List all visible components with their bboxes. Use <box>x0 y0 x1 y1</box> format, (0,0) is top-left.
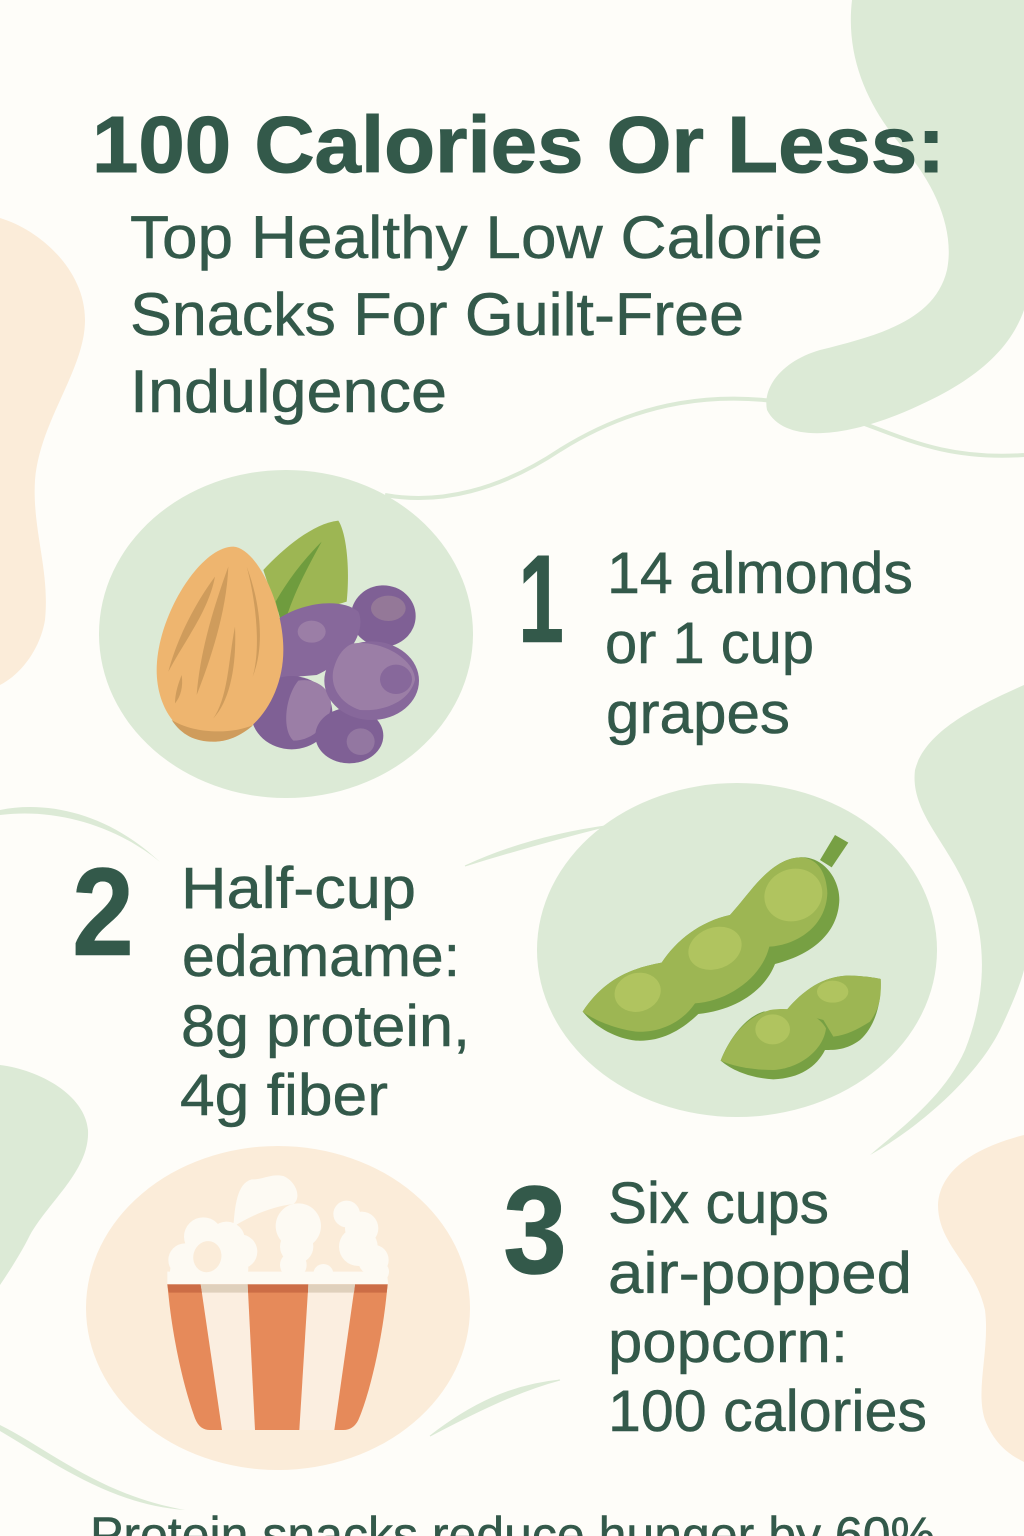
text: item 2: 4g fiber <box>180 1063 388 1128</box>
icon: popcorn bucket <box>167 1175 389 1430</box>
text: item 2: 8g protein, <box>181 994 470 1059</box>
title: 100 Calories Or Less: <box>92 100 945 189</box>
icon: almond with grapes <box>157 521 419 763</box>
text: item 2 <box>180 856 470 1128</box>
subtitle: Snacks For Guilt-Free <box>130 281 744 348</box>
number 2: 2 <box>72 843 134 982</box>
subtitle: Indulgence <box>130 358 447 425</box>
text: item 3: popcorn: <box>608 1310 848 1375</box>
text: item 3: air-popped <box>608 1241 912 1306</box>
panel: edamame <box>537 783 937 1117</box>
text: item 2: Half-cup <box>181 856 416 921</box>
subtitle <box>130 204 823 425</box>
text: item 1: 14 almonds <box>607 541 913 606</box>
text: item 3: Six cups <box>608 1171 829 1236</box>
text: item 1: grapes <box>606 681 790 746</box>
panel: popcorn <box>86 1146 470 1470</box>
icon: edamame pods <box>583 835 881 1079</box>
subtitle: Top Healthy Low Calorie <box>130 204 823 271</box>
circle background: popcorn <box>86 1146 470 1470</box>
number 3: 3 <box>503 1161 567 1300</box>
text: item 1: or 1 cup <box>605 611 814 676</box>
panel: almonds and grapes <box>99 470 473 798</box>
circle background: almonds <box>99 470 473 798</box>
text: item 1 <box>605 541 913 746</box>
circle background: edamame <box>537 783 937 1117</box>
text: item 3 <box>608 1171 927 1444</box>
text: item 2: edamame: <box>182 924 460 989</box>
number 1: 1 <box>518 530 564 669</box>
text: item 3: 100 calories <box>608 1379 927 1444</box>
